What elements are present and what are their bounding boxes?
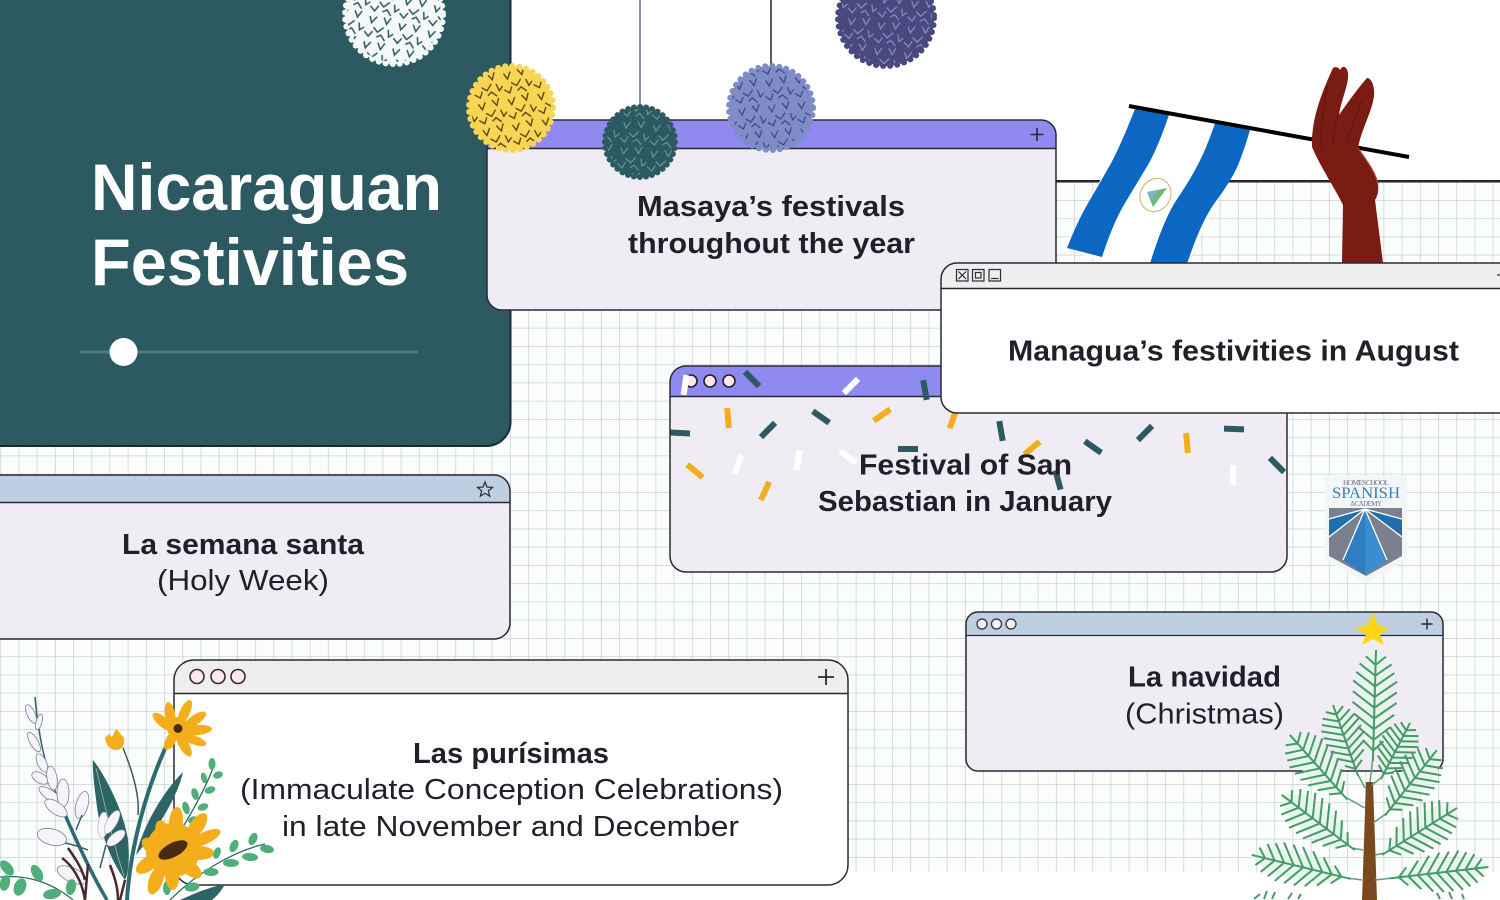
- confetti: [670, 370, 1286, 501]
- text: Immaculate Conception: Las purísimas: [413, 738, 609, 770]
- text: Holy Week: La semana santa: [122, 529, 365, 561]
- pompom: navy: [838, 0, 934, 66]
- text: Masaya: [628, 191, 915, 260]
- pompom: teal: [605, 107, 675, 177]
- logo: Homeschool Spanish Academy: [1325, 476, 1407, 583]
- logo: Homeschool Spanish Academy: HOMESCHOOL: [1343, 478, 1389, 487]
- icon: star: [477, 482, 492, 496]
- pompom: yellow: [469, 66, 553, 150]
- window dots: [977, 619, 1016, 629]
- sunflower centre: [156, 836, 190, 864]
- pompom: white: [345, 0, 443, 64]
- panel: Las purisimas: [174, 660, 848, 885]
- flower centre: [174, 724, 182, 733]
- text: Masaya: Masaya’s festivals: [637, 191, 905, 223]
- narrow leaf: [136, 772, 183, 855]
- panel: La navidad: [966, 612, 1443, 771]
- logo: Homeschool Spanish Academy: ACADEMY: [1350, 500, 1382, 508]
- title: Festivities: [91, 225, 409, 299]
- text: Masaya: throughout the year: [628, 228, 915, 260]
- slider: [80, 338, 418, 366]
- title: Nicaraguan: [91, 150, 442, 224]
- panel: title: [0, 0, 510, 446]
- hand: [1312, 67, 1383, 263]
- text: San Sebastian: Festival of San: [859, 450, 1072, 482]
- window dots: [685, 375, 735, 387]
- panel: Masaya festivals: [487, 120, 1056, 310]
- icon: plus: [1030, 128, 1044, 141]
- flag pole: [1129, 106, 1409, 157]
- text: Christmas: (Christmas): [1125, 698, 1284, 730]
- panel: Managua festivities: [941, 263, 1500, 413]
- pompom: periwinkle: [729, 66, 813, 150]
- bottom leaf: [180, 884, 225, 900]
- text: Holy Week: [122, 529, 365, 597]
- logo: Homeschool Spanish Academy: SPANISH: [1332, 485, 1400, 502]
- hanging strings: [639, 0, 772, 108]
- trunk: [1362, 782, 1377, 900]
- window dots: [190, 670, 245, 684]
- yellow flower top: [150, 698, 212, 759]
- pine tree: [1247, 613, 1491, 900]
- flower bouquet: [0, 697, 275, 900]
- text: Holy Week: (Holy Week): [157, 565, 329, 597]
- text: Managua: Managua’s festivities in August: [1008, 336, 1459, 368]
- title: [91, 150, 442, 299]
- sunflower: [133, 806, 223, 896]
- icon: plus: [818, 669, 834, 685]
- dark sprigs: [62, 848, 125, 900]
- panel: Festival of San Sebastian: [670, 366, 1287, 572]
- green branches: [0, 758, 275, 900]
- large leaf: [93, 760, 129, 880]
- text: Immaculate Conception: [240, 738, 783, 843]
- text: Christmas: La navidad: [1128, 662, 1281, 694]
- text: San Sebastian: Sebastian in January: [818, 486, 1112, 518]
- flag of Nicaragua: [1067, 109, 1250, 270]
- text: San Sebastian: [818, 450, 1112, 518]
- text: Immaculate Conception: (Immaculate Conception Celebrations): [240, 774, 783, 806]
- fronds: [1247, 649, 1491, 899]
- star: [1354, 613, 1389, 645]
- text: Immaculate Conception: in late November and December: [282, 811, 739, 843]
- icon: plus: [1422, 618, 1432, 630]
- yellow bud: [105, 729, 124, 750]
- white flower: [97, 808, 128, 849]
- lavender sprig: [23, 697, 107, 900]
- panel: La semana santa: [0, 475, 510, 639]
- text: Christmas: [1125, 662, 1284, 730]
- flower stems: [127, 738, 170, 900]
- window buttons: [956, 270, 1500, 281]
